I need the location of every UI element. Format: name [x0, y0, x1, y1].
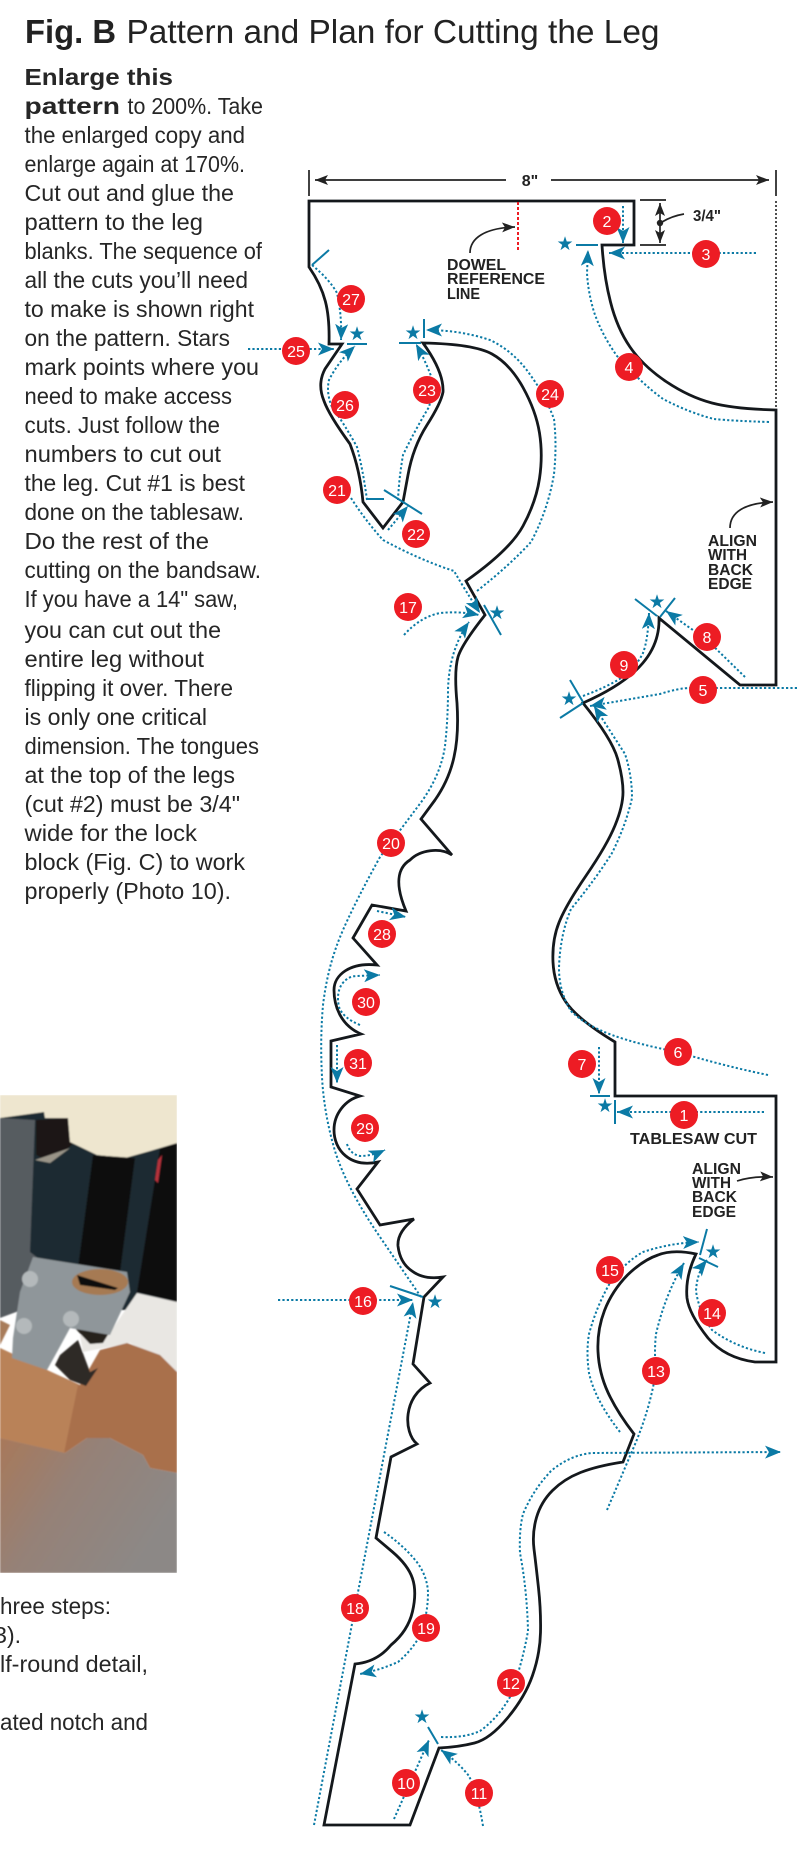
- instructions text block: you can cut out the: [24, 617, 221, 643]
- instructions text block: blanks. The sequence of: [24, 238, 263, 264]
- cut 23: [398, 322, 441, 500]
- cut 6: [559, 706, 768, 1075]
- instructions text block: to 200%. Take: [128, 93, 263, 119]
- cut 26: ★: [348, 323, 366, 345]
- instructions text block: block (Fig. C) to work: [24, 849, 246, 875]
- instructions text block: entire leg without: [24, 646, 205, 672]
- align with back edge callout, lower: BACK: [692, 1189, 737, 1206]
- cut 22: 22: [407, 527, 425, 544]
- cut 18: [314, 1302, 413, 1825]
- cut 15: [588, 1229, 707, 1432]
- cut 8: [660, 598, 745, 677]
- cut 13: [607, 1263, 684, 1510]
- title: Pattern and Plan for Cutting the Leg: [126, 13, 660, 50]
- cut 16: [278, 1286, 444, 1315]
- instructions text block: numbers to cut out: [24, 441, 222, 467]
- instructions text block: If you have a 14" saw,: [24, 586, 238, 612]
- cut 30: 30: [357, 995, 375, 1012]
- dimension: 3/4 inch tongue: [640, 200, 721, 245]
- instructions text block: at the top of the legs: [24, 762, 235, 788]
- tablesaw cut label: TABLESAW CUT: [630, 1131, 757, 1148]
- align with back edge callout, lower: WITH: [692, 1175, 731, 1192]
- cut 9: [560, 591, 666, 718]
- cut 24: [424, 319, 564, 591]
- instructions text block: cutting on the bandsaw.: [24, 557, 261, 583]
- instructions text block: the leg. Cut #1 is best: [24, 470, 246, 496]
- align with back edge callout, upper: ALIGN: [708, 533, 757, 550]
- cut 22: [384, 490, 430, 548]
- leg pattern outline: [309, 201, 776, 1825]
- instructions text block: dimension. The tongues: [24, 733, 259, 759]
- cut 30: [338, 975, 380, 1025]
- cut 6: 6: [674, 1045, 683, 1062]
- dowel reference line callout: REFERENCE: [447, 271, 545, 288]
- cut 27: 27: [342, 292, 360, 309]
- instructions text block: [23, 64, 263, 904]
- cut 3: [556, 233, 756, 268]
- cut 24: 24: [541, 387, 559, 404]
- cut 20: 20: [382, 836, 400, 853]
- cut 21: 21: [328, 483, 346, 500]
- cut 12: 12: [502, 1676, 520, 1693]
- cut 1: [590, 1095, 764, 1129]
- cut 19: 19: [417, 1621, 435, 1638]
- cut 7: [568, 1047, 599, 1094]
- cut 7: 7: [578, 1057, 587, 1074]
- instructions text block: mark points where you: [24, 354, 259, 380]
- instructions text block: Enlarge this: [24, 64, 173, 90]
- cut 27: [312, 250, 365, 340]
- cut 16: ★: [426, 1291, 444, 1313]
- cut 25: 25: [287, 344, 305, 361]
- cut 14: ★: [704, 1241, 722, 1263]
- cut 29: [347, 1114, 385, 1156]
- photo caption fragments: ated notch and: [0, 1709, 148, 1735]
- cut 2: [593, 206, 623, 243]
- photo caption fragments: lf-round detail,: [0, 1651, 148, 1677]
- cut 20: [321, 622, 469, 1297]
- instructions text block: enlarge again at 170%.: [24, 151, 245, 177]
- title: Fig. B: [25, 13, 116, 50]
- cut 19: [360, 1532, 440, 1674]
- instructions text block: pattern to the leg: [24, 209, 203, 235]
- instructions text block: (cut #2) must be 3/4": [24, 791, 240, 817]
- instructions text block: Cut out and glue the: [24, 180, 234, 206]
- instructions text block: on the pattern. Stars: [24, 325, 230, 351]
- cut 18: 18: [346, 1601, 364, 1618]
- cut 9: ★: [648, 591, 666, 613]
- cut 11: [441, 1750, 493, 1826]
- cut 1: 1: [680, 1108, 689, 1125]
- align with back edge callout, lower: EDGE: [692, 1204, 736, 1221]
- cut 11: 11: [471, 1786, 487, 1803]
- dowel reference line callout: LINE: [447, 286, 480, 303]
- instructions text block: Do the rest of the: [24, 528, 209, 554]
- instructions text block: need to make access: [24, 383, 232, 409]
- align with back edge callout, lower: ALIGN: [692, 1161, 741, 1178]
- cut 14: 14: [703, 1306, 721, 1323]
- cut 5: [590, 676, 797, 706]
- cut 21: [323, 476, 480, 613]
- instructions text block: flipping it over. There: [24, 675, 233, 701]
- dimension: 3/4 inch tongue: 3/4": [693, 208, 721, 225]
- align with back edge callout, upper: EDGE: [708, 576, 752, 593]
- cut 5: 5: [699, 683, 708, 700]
- cut 4: 4: [625, 360, 634, 377]
- instructions text block: pattern: [24, 93, 120, 119]
- cut 17: [394, 593, 506, 635]
- photo caption fragments: hree steps:: [0, 1593, 111, 1619]
- cut 16: 16: [354, 1294, 372, 1311]
- cut 9: 9: [620, 658, 629, 675]
- cut 31: [337, 1045, 372, 1083]
- cut 31: 31: [349, 1056, 367, 1073]
- cut 12: [441, 1452, 781, 1737]
- instructions text block: the enlarged copy and: [24, 122, 245, 148]
- cut 3: ★: [556, 233, 574, 255]
- cut 29: 29: [356, 1121, 374, 1138]
- instructions text block: to make is shown right: [24, 296, 255, 322]
- cut 10: [392, 1706, 438, 1819]
- dimension: 8 inch width: 8": [522, 173, 538, 190]
- cut 14: [696, 1241, 765, 1353]
- photo caption fragments: [0, 1593, 148, 1735]
- cut 26: [328, 323, 384, 500]
- instructions text block: cuts. Just follow the: [24, 412, 220, 438]
- cut 25: [248, 337, 334, 365]
- cut 28: 28: [373, 927, 391, 944]
- cut 23: ★: [404, 322, 422, 344]
- cut 17: 17: [399, 600, 417, 617]
- instructions text block: properly (Photo 10).: [24, 878, 231, 904]
- cut 9: ★: [560, 688, 578, 710]
- cut 10: ★: [413, 1706, 431, 1728]
- align with back edge callout, upper: BACK: [708, 562, 753, 579]
- cut 4: [587, 250, 769, 422]
- cut 15: 15: [601, 1263, 619, 1280]
- photo: bandsaw cutting the leg: [0, 1095, 177, 1573]
- align with back edge callout, upper: [708, 502, 773, 593]
- dowel reference line callout: [447, 202, 545, 303]
- align with back edge callout, upper: WITH: [708, 547, 747, 564]
- cut 26: 26: [336, 398, 354, 415]
- instructions text block: all the cuts you’ll need: [24, 267, 248, 293]
- dimension: 8 inch width: [309, 170, 776, 407]
- instructions text block: is only one critical: [24, 704, 207, 730]
- instructions text block: done on the tablesaw.: [24, 499, 244, 525]
- cut 2: 2: [603, 214, 612, 231]
- cut 28: [368, 911, 406, 948]
- cut 23: 23: [418, 383, 436, 400]
- cut 13: 13: [647, 1364, 665, 1381]
- dowel reference line callout: DOWEL: [447, 257, 506, 274]
- instructions text block: wide for the lock: [23, 820, 198, 846]
- cut 8: 8: [703, 630, 712, 647]
- align with back edge callout, lower: [692, 1161, 773, 1221]
- cut 17: ★: [488, 602, 506, 624]
- cut 10: 10: [397, 1776, 415, 1793]
- cut 3: 3: [702, 247, 711, 264]
- cut 1: ★: [596, 1095, 614, 1117]
